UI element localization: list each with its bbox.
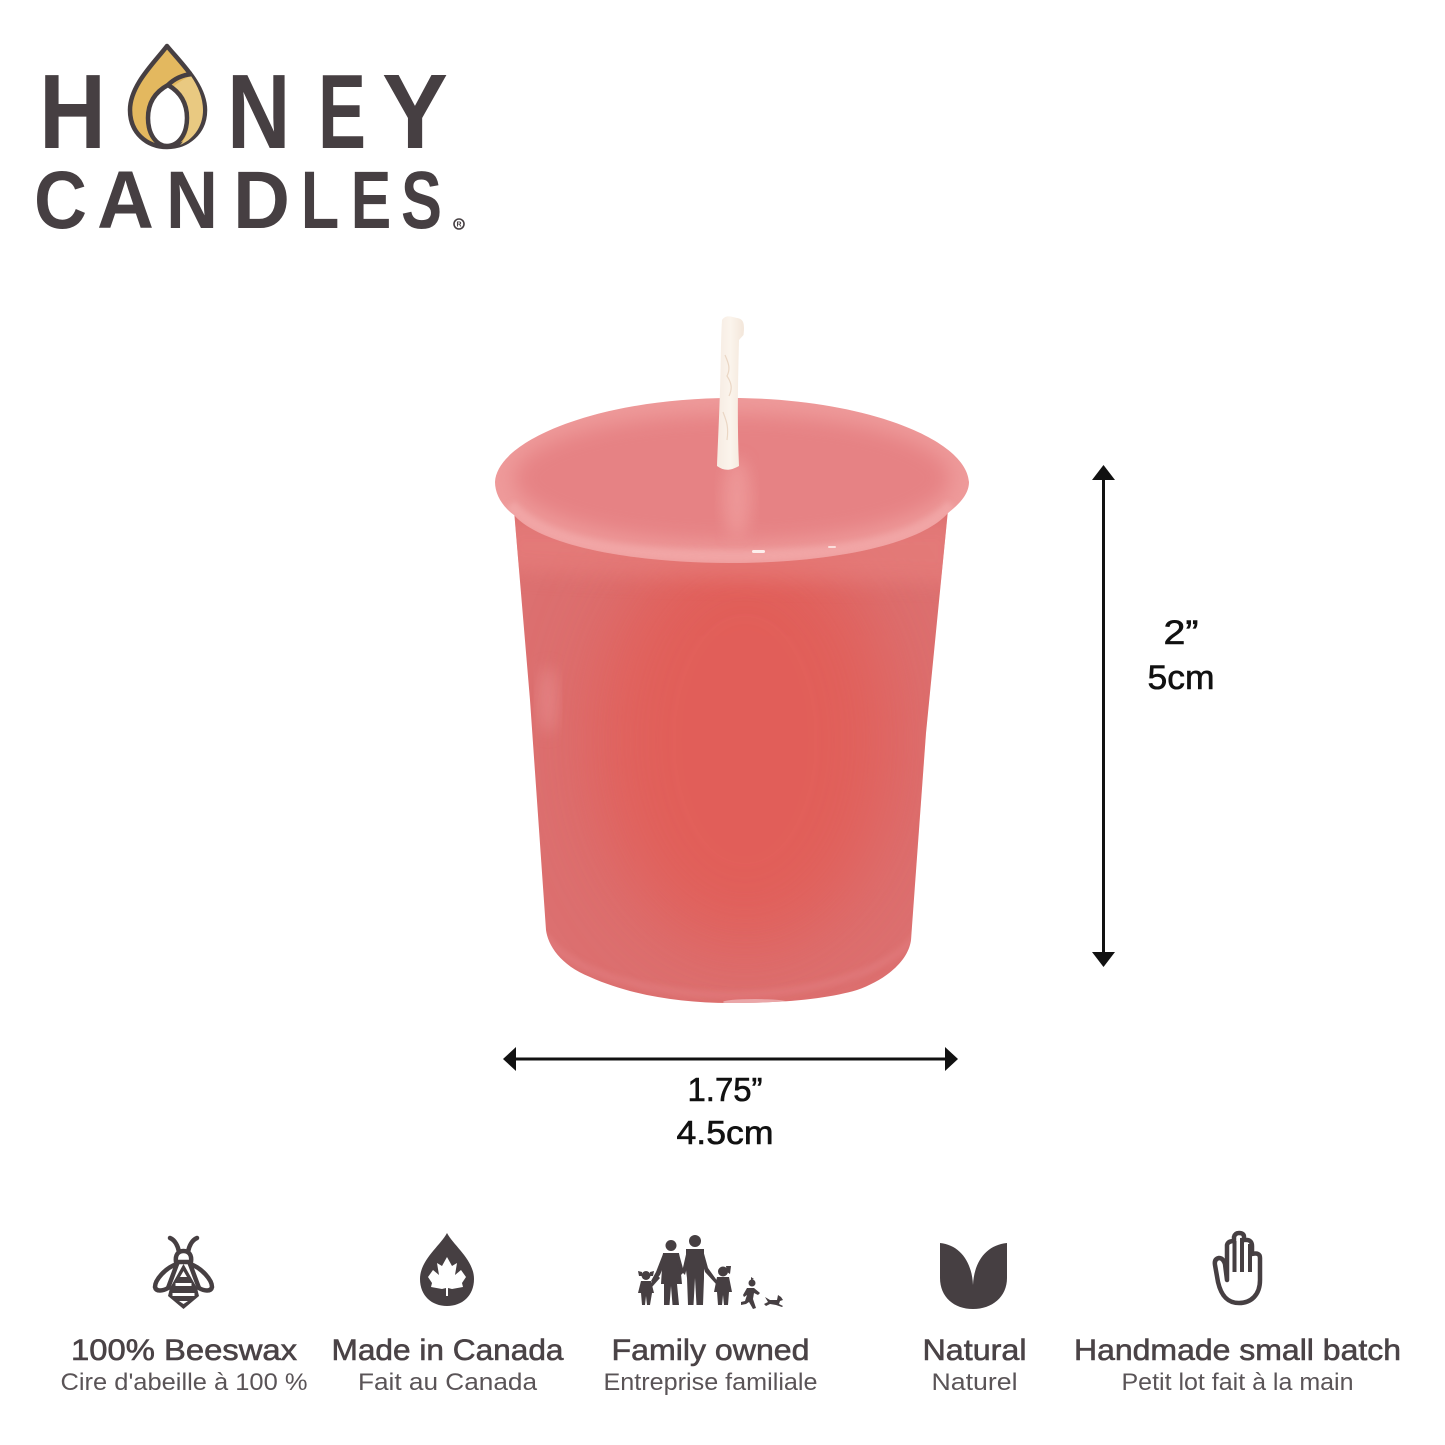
height label: 5cm — [1148, 659, 1214, 697]
feature: Family owned — [604, 1235, 818, 1396]
candle body — [500, 510, 960, 1005]
sublabel: Fait au Canada — [358, 1369, 538, 1396]
height label — [1148, 614, 1214, 697]
icon: family — [638, 1235, 783, 1309]
width label — [676, 1071, 774, 1151]
logo word: CANDLES: S — [401, 155, 442, 246]
logo word: HONEY — [39, 53, 448, 171]
logo word: CANDLES: N — [166, 155, 218, 246]
icon: hand — [1215, 1233, 1260, 1303]
logo word: HONEY: N — [227, 53, 290, 171]
candle top rim — [495, 398, 969, 563]
label: Handmade small batch: Handmade small batch — [1074, 1334, 1401, 1367]
label: Family owned: Family owned — [612, 1334, 810, 1367]
logo word: CANDLES: C — [34, 155, 87, 246]
logo word: CANDLES — [34, 155, 442, 246]
logo word: CANDLES: A — [97, 155, 154, 246]
icon: bee — [155, 1238, 212, 1309]
logo word: HONEY: Y — [382, 53, 448, 171]
registered mark — [454, 219, 464, 229]
logo word: CANDLES: E — [351, 155, 391, 246]
candle — [495, 316, 969, 1005]
sublabel: Naturel — [932, 1369, 1018, 1396]
height label: 2” — [1164, 614, 1198, 652]
candle wick — [717, 316, 744, 470]
logo word: HONEY: E — [318, 53, 366, 171]
label: Natural: Natural — [922, 1334, 1026, 1367]
logo word: CANDLES: L — [301, 155, 339, 246]
sublabel: Entreprise familiale — [604, 1369, 818, 1396]
icon: logo flame drop — [130, 46, 205, 147]
arrow: width dimension — [503, 1047, 958, 1071]
icon: maple drop — [420, 1233, 474, 1306]
icon: tulip leaf — [940, 1243, 1007, 1309]
feature: Made in Canada — [332, 1233, 564, 1396]
label: Made in Canada: Made in Canada — [332, 1334, 564, 1367]
feature: Natural — [922, 1243, 1026, 1396]
feature: Handmade small batch — [1074, 1233, 1401, 1396]
logo word: HONEY: H — [39, 53, 106, 171]
arrow: height dimension — [1092, 465, 1115, 967]
sublabel: Petit lot fait à la main — [1122, 1369, 1354, 1396]
sublabel: Cire d'abeille à 100 % — [60, 1369, 308, 1396]
width label: 4.5cm — [676, 1114, 774, 1151]
label: 100% Beeswax: 100% Beeswax — [71, 1334, 297, 1367]
feature: 100% Beeswax — [60, 1238, 308, 1396]
registered mark: R — [456, 222, 462, 228]
logo: Honey Candles — [34, 46, 464, 246]
width label: 1.75” — [688, 1071, 762, 1108]
logo word: CANDLES: D — [233, 155, 290, 246]
